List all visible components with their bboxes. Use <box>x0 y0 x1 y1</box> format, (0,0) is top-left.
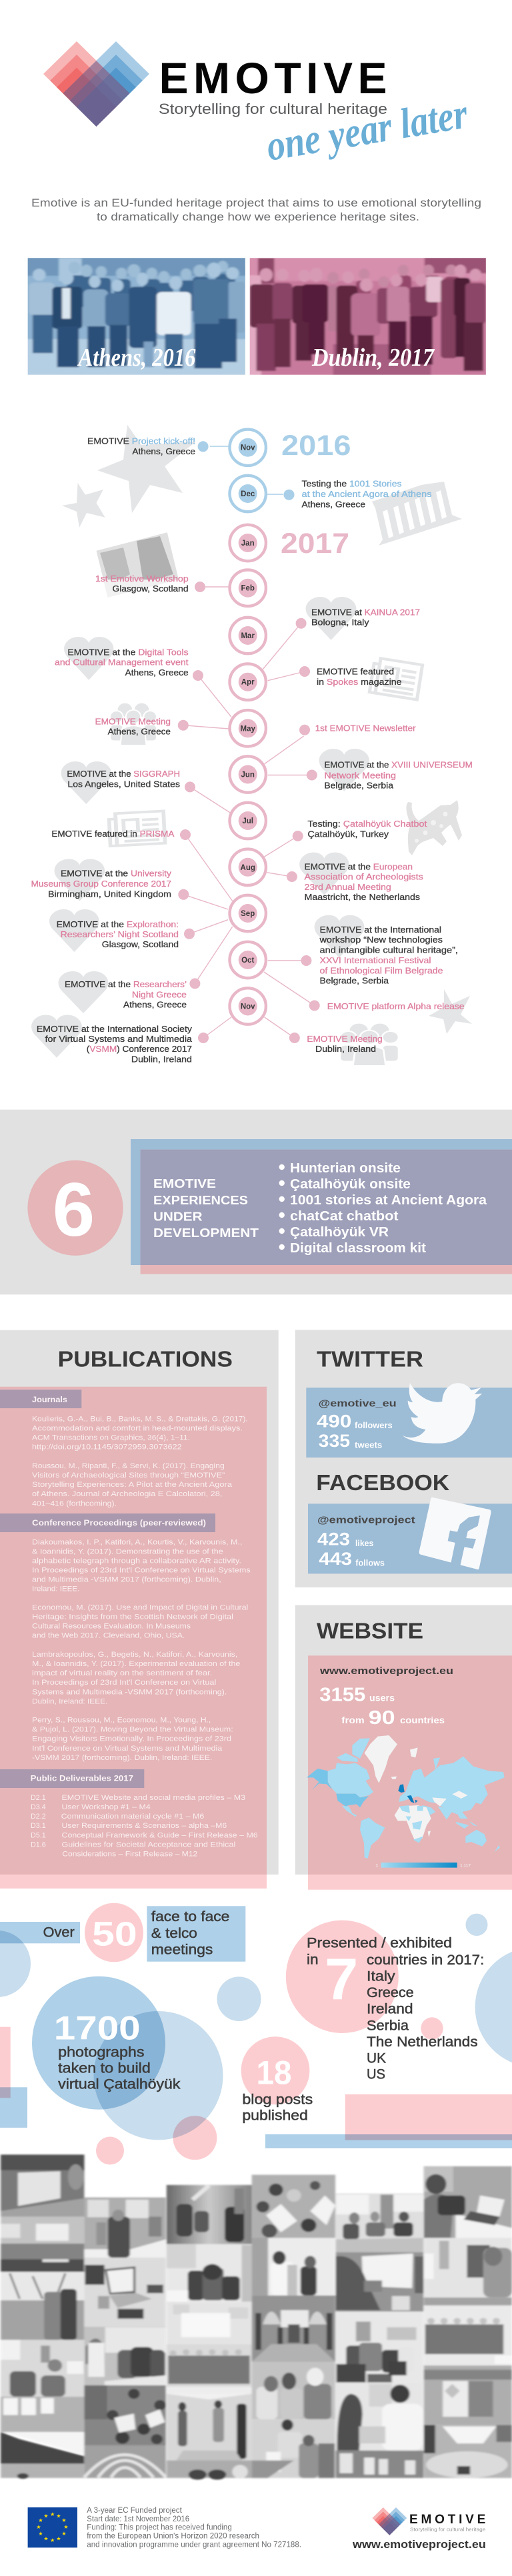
event: first workshop: Glasgow, Scotland <box>112 584 189 594</box>
event: European Association: Association of Archeologists <box>304 872 423 881</box>
website stats <box>319 1665 453 1729</box>
stat: 18 blog posts: blog posts <box>242 2092 313 2107</box>
event: EMOTIVE Meeting Dublin: EMOTIVE Meeting <box>307 1035 383 1044</box>
event: University Museums Group: Museums Group Conference 2017 <box>31 879 171 889</box>
section: journals: ACM Transactions on Graphics, 36(4), 1–11. <box>32 1434 190 1442</box>
tagline: Storytelling for cultural heritage <box>159 101 387 117</box>
website stats: countries <box>400 1715 445 1725</box>
icon: heart european <box>299 853 349 895</box>
section: conference proceedings: M., & Ioannidis, Y. (2017). Experimental evaluation of the <box>32 1660 240 1668</box>
event: VSMM: for Virtual Systems and Multimedia <box>45 1035 192 1044</box>
section: public deliverables: D5.1 <box>31 1831 46 1839</box>
website stats: 3155 <box>319 1684 365 1705</box>
twitter card: followers <box>355 1421 393 1430</box>
timeline month: Mar <box>229 618 266 653</box>
section: conference proceedings: Lambrakopoulos, G., Begetis, N., Katifori, A., Karvounis, <box>32 1651 237 1659</box>
map legend <box>375 1863 471 1868</box>
publications heading: PUBLICATIONS <box>58 1347 233 1372</box>
event: European Association: EMOTIVE at the European <box>304 862 413 871</box>
twitter card: 490 <box>317 1412 351 1432</box>
event: Explorathon <box>57 920 195 949</box>
big number 6: 6 <box>53 1168 95 1252</box>
event: VSMM <box>37 1025 209 1065</box>
map legend: 1,117 <box>460 1863 471 1868</box>
timeline month: Nov 2016 <box>229 429 266 466</box>
event: newsletter <box>299 724 416 735</box>
event: University Museums Group: Birmingham, United Kingdom <box>48 889 171 899</box>
funding text <box>87 2507 301 2549</box>
section: public deliverables: D2.2 <box>31 1813 46 1821</box>
timeline month: Nov 2017 <box>229 988 266 1025</box>
event: UNIVERSEUM: Belgrade, Serbia <box>324 781 393 790</box>
event: UNIVERSEUM <box>307 761 473 790</box>
collage column 2 <box>84 2198 166 2478</box>
event: SIGGRAPH <box>67 769 195 792</box>
section: conference proceedings: Heritage: Insights from the Scottish Network of Digital <box>32 1613 233 1621</box>
icon: heart digital tools <box>64 637 113 680</box>
experiences list: Hunterian onsite <box>290 1160 401 1176</box>
panel: six experiences <box>0 1110 512 1294</box>
section: public deliverables: D3.1 <box>31 1822 46 1830</box>
section: public deliverables: D2.1 <box>31 1794 46 1802</box>
event: University Museums Group <box>31 869 189 900</box>
website stats: 90 <box>369 1707 395 1729</box>
stat: 7 countries: Italy <box>367 1968 395 1984</box>
funding text: A 3-year EC Funded project <box>87 2507 183 2515</box>
section: public deliverables: EMOTIVE Website and social media profiles – M3 <box>61 1794 245 1802</box>
experiences heading: DEVELOPMENT <box>153 1226 259 1240</box>
stat: over 50 meetings <box>43 1909 229 1957</box>
world map of visitors <box>307 1735 505 1868</box>
section: conference proceedings: alphabetic telegraph through a collaborative AR activity. <box>32 1557 241 1565</box>
twitter card <box>306 1383 512 1458</box>
section: conference proceedings: Ireland: IEEE. <box>32 1585 79 1593</box>
icon: cat <box>406 800 462 855</box>
event: Researchers Night Greece <box>65 978 200 1010</box>
panel: website <box>295 1605 512 1890</box>
icon: people athens <box>110 703 157 745</box>
stat: 1700 photographs <box>54 2010 181 2092</box>
facebook card: likes <box>355 1539 373 1548</box>
section: public deliverables: Public Deliverables 2017 <box>31 1773 133 1783</box>
experiences list <box>279 1160 487 1256</box>
panel: twitter and facebook <box>295 1330 512 1587</box>
event: Digital Tools: Athens, Greece <box>125 668 189 677</box>
twitter card: tweets <box>355 1441 382 1450</box>
event: chatbot: Çatalhöyük, Turkey <box>307 830 389 839</box>
facebook card: 423 <box>317 1529 350 1549</box>
collage column 6 <box>424 2166 512 2478</box>
big number 6 <box>27 1160 123 1256</box>
event: KAINUA: Bologna, Italy <box>311 618 369 627</box>
experiences heading <box>153 1176 259 1240</box>
section: public deliverables: User Workshop #1 – M4 <box>61 1803 151 1811</box>
event: 1001 Stories test <box>284 480 432 509</box>
event: UNIVERSEUM: Network Meeting <box>324 771 396 780</box>
script subtitle: one year later: one year later <box>263 89 471 170</box>
twitter heading: TWITTER <box>317 1347 423 1372</box>
website heading: WEBSITE <box>317 1619 423 1643</box>
facebook card <box>308 1500 512 1573</box>
section: conference proceedings: Systems and Multimedia -VSMM 2017 (forthcoming). <box>32 1688 227 1696</box>
section: journals: Koulieris, G.-A., Bui, B., Banks, M. S., & Drettakis, G. (2017). <box>32 1415 248 1423</box>
EU flag: ★ <box>43 2535 49 2542</box>
event: KAINUA <box>296 608 420 629</box>
stat: 1700 photographs: virtual Çatalhöyük <box>58 2077 181 2092</box>
timeline connectors: 2017 <box>183 587 315 1038</box>
timeline month: May <box>229 710 266 747</box>
photo: workshop <box>96 532 179 598</box>
icon: heart explorathon <box>49 909 99 952</box>
EU flag: ★ <box>38 2517 43 2523</box>
year: 2016: 2016 <box>281 430 351 462</box>
website stats: users <box>369 1692 395 1703</box>
EU flag: ★ <box>43 2513 49 2519</box>
event: EMOTIVE Meeting Dublin: Dublin, Ireland <box>315 1045 376 1054</box>
event: International workshop: of Ethnological Film Belgrade <box>320 966 443 975</box>
experiences list: Çatalhöyük onsite <box>290 1176 411 1192</box>
stat: 1700 photographs: photographs <box>58 2044 144 2060</box>
timeline connectors: 2016 <box>210 446 283 494</box>
event: European Association <box>287 862 423 902</box>
funding text: Start date: 1st November 2016 <box>87 2515 189 2523</box>
EU flag: ★ <box>63 2524 69 2530</box>
event: Explorathon: EMOTIVE at the Explorathon: <box>57 920 179 929</box>
funding text: and innovation programme under grant agreement No 727188. <box>87 2541 301 2549</box>
icon: twitter bird <box>402 1383 482 1444</box>
timeline month: Aug <box>229 849 266 885</box>
collage column 5 <box>336 2194 423 2478</box>
section: journals <box>0 1390 248 1507</box>
section: conference proceedings: and the Web 2017. Cleveland, Ohio, USA. <box>32 1632 185 1640</box>
timeline month: Sep <box>229 895 266 931</box>
EU flag: ★ <box>50 2537 55 2543</box>
event: EMOTIVE Meeting Athens: Athens, Greece <box>108 727 171 737</box>
event: SIGGRAPH: Los Angeles, United States <box>67 779 180 789</box>
event: Alpha release: EMOTIVE platform Alpha release <box>327 1002 465 1011</box>
icon: small star <box>62 483 105 528</box>
stat: 7 countries: in <box>307 1952 319 1967</box>
event: Spokes <box>299 666 402 687</box>
footer url: www.emotiveproject.eu <box>352 2538 486 2551</box>
timeline month: Dec 2016 <box>229 476 266 512</box>
event: European Association: Maastricht, the Netherlands <box>304 893 420 902</box>
facebook card: @emotiveproject <box>317 1515 415 1525</box>
section: journals: Roussou, M., Ripanti, F., & Servi, K. (2017). Engaging <box>32 1462 225 1470</box>
timeline month: Feb <box>229 570 266 606</box>
footer logo: Storytelling for cultural heritage <box>410 2527 485 2533</box>
section: conference proceedings: Perry, S., Roussou, M., Economou, M., Young, H., <box>32 1717 211 1725</box>
icon: heart international workshop <box>315 915 364 958</box>
section: conference proceedings: Diakoumakos, I. P., Katifori, A., Kourtis, V., Karvounis, M., <box>32 1538 242 1546</box>
event: European Association: 23rd Annual Meeting <box>304 883 391 892</box>
event: Researchers Night Greece: Night Greece <box>132 990 187 999</box>
event: UNIVERSEUM: EMOTIVE at the XVIII UNIVERSEUM <box>324 761 473 770</box>
section: conference proceedings: Conference Proceedings (peer-reviewed) <box>32 1518 206 1527</box>
event: EMOTIVE Meeting Athens: EMOTIVE Meeting <box>95 717 171 727</box>
section: journals: Accommodation and comfort in head-mounted displays. <box>32 1424 243 1432</box>
overlapping rectangles <box>131 1139 512 1274</box>
event: International workshop: workshop “New technologies <box>319 935 443 945</box>
event: University Museums Group: EMOTIVE at the University <box>61 869 172 878</box>
EU flag: ★ <box>56 2535 61 2542</box>
event: VSMM: (VSMM ) Conference 2017 <box>87 1045 192 1054</box>
event: International workshop <box>301 925 458 986</box>
event: Researchers Night Greece: Athens, Greece <box>123 1001 187 1010</box>
event: Spokes: in Spokes magazine <box>317 677 402 687</box>
map legend: 1 <box>375 1863 378 1868</box>
event: International workshop: EMOTIVE at the International <box>320 925 441 935</box>
event: Researchers Night Greece: EMOTIVE at the Researchers’ <box>65 980 187 989</box>
event: International workshop: XXVI International Festival <box>320 956 431 965</box>
twitter card: 335 <box>319 1431 350 1451</box>
stat: 7 countries <box>307 1935 484 2082</box>
experiences heading: EMOTIVE <box>153 1176 216 1190</box>
experiences list: Çatalhöyük VR <box>290 1224 389 1240</box>
logo: heart of overlapping diamonds <box>43 41 149 127</box>
title: EMOTIVE: EMOTIVE <box>159 53 387 103</box>
timeline month: May: May <box>241 725 255 733</box>
stat: over 50 meetings: & telco <box>151 1926 197 1941</box>
event: International workshop: and intangible cultural heritage”, <box>320 946 458 955</box>
section: conference proceedings: & Ioannidis, Y. (2017). Demonstrating the use of the <box>32 1547 223 1555</box>
section: conference proceedings: In Proceedings of 23rd Int'l Conference on Virtual Systems <box>32 1566 251 1574</box>
section: journals: of Athens. Journal of Archeologia E Calcolatori, 28, <box>32 1490 222 1498</box>
section: conference proceedings: Dublin, Ireland: IEEE. <box>32 1697 107 1705</box>
section: public deliverables: Conceptual Framework & Guide – First Release – M6 <box>61 1831 258 1839</box>
stat: over 50 meetings: Over <box>43 1925 75 1940</box>
experiences list: 1001 stories at Ancient Agora <box>290 1192 487 1208</box>
section: public deliverables: Considerations – First Release – M12 <box>62 1850 197 1858</box>
intro text: to dramatically change how we experience heritage sites. <box>97 211 419 223</box>
stat: 18 blog posts: 18 <box>256 2054 291 2091</box>
experiences list: chatCat chatbot <box>290 1208 399 1224</box>
event: kick-off: EMOTIVE Project kick-off! <box>87 437 195 446</box>
facebook card: 443 <box>319 1549 352 1569</box>
timeline month: Aug: Aug <box>241 864 255 872</box>
intro text: Emotive is an EU-funded heritage project that aims to use emotional storytelling <box>31 197 481 209</box>
event: first workshop: 1st Emotive Workshop <box>95 574 189 584</box>
stat: 7 countries: Greece <box>367 1985 414 2000</box>
event: Spokes: EMOTIVE featured <box>317 667 394 677</box>
event: kick-off: Athens, Greece <box>132 447 195 456</box>
event: International workshop: Belgrade, Serbia <box>320 977 389 986</box>
photo: Athens 2016 <box>23 255 251 377</box>
event: newsletter: 1st EMOTIVE Newsletter <box>315 724 416 733</box>
event: chatbot <box>293 819 427 841</box>
footer logo <box>372 2507 485 2535</box>
icon: star alpha release <box>429 989 472 1034</box>
collage column 4 <box>252 2175 335 2478</box>
experiences list: Digital classroom kit <box>290 1240 426 1256</box>
stat: over 50 meetings: 50 <box>92 1915 137 1953</box>
intro text <box>31 197 481 223</box>
section: public deliverables: D1.6 <box>31 1841 46 1849</box>
website stats: www.emotiveproject.eu <box>319 1665 453 1677</box>
experiences heading: EXPERIENCES <box>153 1193 248 1207</box>
event: 1001 Stories test: Testing the 1001 Stories <box>301 480 401 489</box>
section: public deliverables: User Requirements & Scenarios – alpha –M6 <box>61 1822 227 1830</box>
section: journals: 401–416 (forthcoming). <box>32 1500 117 1507</box>
section: conference proceedings <box>0 1513 251 1762</box>
section: conference proceedings: & Pujol, L. (2017). Moving Beyond the Virtual Museum: <box>32 1726 233 1734</box>
stat: 18 blog posts <box>242 2054 313 2123</box>
timeline month: Jan: Jan <box>241 540 255 548</box>
event: VSMM: Dublin, Ireland <box>131 1055 192 1065</box>
footer logo: EMOTIVE <box>409 2513 485 2527</box>
icon: people dublin <box>340 1023 399 1066</box>
collage column 3 <box>167 2185 252 2479</box>
panel: publications <box>0 1330 279 1889</box>
event: PRISMA: EMOTIVE featured in PRISMA <box>51 829 175 839</box>
timeline month: Apr <box>229 663 266 700</box>
facebook card: follows <box>355 1558 385 1567</box>
section: conference proceedings: -VSMM 2017 (forthcoming). Dublin, Ireland: IEEE. <box>32 1754 212 1762</box>
section: conference proceedings: Int'l Conference on Virtual Systems and Multimedia <box>32 1745 222 1753</box>
stat: 7 countries: US <box>367 2067 385 2082</box>
icon: heart researchers night <box>59 971 108 1013</box>
event: Digital Tools: and Cultural Management event <box>55 658 189 667</box>
timeline month: Apr: Apr <box>241 679 255 687</box>
stat: 7 countries: Ireland <box>367 2002 413 2017</box>
photo caption: Dublin: Dublin, 2017 <box>311 344 435 372</box>
section: conference proceedings: Engaging Visitors Emotionally. In Proceedings of 23rd <box>32 1735 231 1743</box>
timeline month: Jul: Jul <box>242 817 253 825</box>
section: conference proceedings: Cultural Resources Evaluation. In Museums <box>32 1623 191 1631</box>
event: KAINUA: EMOTIVE at KAINUA 2017 <box>311 608 420 617</box>
timeline month: Oct: Oct <box>241 957 254 965</box>
icon: newspaper prisma <box>109 811 165 846</box>
stat: over 50 meetings: face to face <box>151 1909 229 1925</box>
stat: 7 countries: UK <box>367 2051 386 2066</box>
stat: 7 countries: Presented / exhibited <box>307 1935 452 1950</box>
section: journals: Journals <box>32 1395 67 1404</box>
event: EMOTIVE Meeting Athens <box>95 717 189 737</box>
timeline month: Nov 2017: Nov <box>241 1003 255 1011</box>
section: conference proceedings: and Multimedia -VSMM 2017 (forthcoming). Dublin, <box>32 1575 221 1583</box>
stat: 7 countries: countries in 2017: <box>367 1952 484 1968</box>
timeline month: Dec 2016: Dec <box>241 490 255 498</box>
EU flag: ★ <box>50 2511 55 2517</box>
photo caption: Athens: Athens, 2016 <box>77 344 195 372</box>
experiences heading: UNDER <box>153 1210 203 1224</box>
stat: 7 countries: 7 <box>325 1946 358 2012</box>
event: Digital Tools <box>55 647 203 681</box>
section: public deliverables <box>0 1769 258 1858</box>
icon: newspaper spokes <box>369 657 423 699</box>
section: journals: Visitors of Archaeological Sites through “EMOTIVE” <box>32 1472 225 1480</box>
EU flag: ★ <box>38 2531 43 2537</box>
event: chatbot: Testing: Çatalhöyük Chatbot <box>307 819 427 829</box>
collage column 1 <box>1 2154 84 2479</box>
section: journals: http://doi.org/10.1145/3072959.3073622 <box>32 1444 182 1452</box>
icon: heart vsmm <box>31 1015 82 1058</box>
event: EMOTIVE Meeting Dublin <box>289 1033 383 1054</box>
section: conference proceedings: In Proceedings of 23rd Int'l Conference on Virtual <box>32 1679 216 1687</box>
section: public deliverables: Guidelines for Societal Acceptance and Ethical <box>61 1841 235 1849</box>
event: Alpha release <box>309 1001 465 1011</box>
stat: 1700 photographs: 1700 <box>54 2010 141 2047</box>
timeline month: Jan <box>229 525 266 561</box>
event: 1001 Stories test: at the Ancient Agora of Athens <box>301 490 432 499</box>
twitter card: @emotive_eu <box>319 1398 397 1409</box>
section: public deliverables: D3.4 <box>31 1803 46 1811</box>
icon: heart universeum <box>319 749 369 791</box>
decorative stat bubbles and bars <box>0 1903 512 2165</box>
EU flag: ★ <box>56 2513 61 2519</box>
stat: 7 countries: Serbia <box>367 2018 409 2033</box>
EU flag <box>28 2507 77 2547</box>
timeline month: Sep: Sep <box>241 910 255 918</box>
icon: facebook logo <box>421 1500 489 1567</box>
timeline month: Jun <box>229 756 266 793</box>
section: public deliverables: Communication material cycle #1 – M6 <box>61 1813 204 1821</box>
EU flag: ★ <box>61 2517 67 2523</box>
section: conference proceedings: impact of virtual reality on the sentiment of fear. <box>32 1669 212 1677</box>
year: 2017: 2017 <box>281 528 349 560</box>
event: Explorathon: Glasgow, Scotland <box>102 940 179 949</box>
funding text: Funding: This project has received funding <box>87 2524 232 2532</box>
section: journals: Storytelling Experiences: A Pilot at the Ancient Agora <box>32 1481 232 1489</box>
stat: over 50 meetings: meetings <box>151 1942 213 1957</box>
icon: heart siggraph <box>61 761 111 804</box>
timeline month: Nov 2016: Nov <box>241 444 255 452</box>
section: conference proceedings: Economou, M. (2017). Use and Impact of Digital in Cultural <box>32 1604 248 1612</box>
event: VSMM: EMOTIVE at the International Society <box>37 1025 193 1034</box>
stat: 18 blog posts: published <box>242 2108 308 2123</box>
website stats: from <box>341 1715 365 1725</box>
photo collage <box>1 2154 512 2479</box>
icon: Parthenon temple <box>372 482 462 546</box>
stat: 7 countries: The Netherlands <box>367 2034 478 2050</box>
photo: Dublin 2017 <box>245 255 493 377</box>
timeline month: Oct <box>229 942 266 978</box>
event: first workshop <box>95 574 205 594</box>
timeline month: Feb: Feb <box>241 585 255 593</box>
timeline month: Jul <box>229 803 266 839</box>
stat: 1700 photographs: taken to build <box>58 2061 151 2076</box>
EU flag: ★ <box>36 2524 41 2530</box>
icon: heart kainua <box>306 597 356 640</box>
event: SIGGRAPH: EMOTIVE at the SIGGRAPH <box>67 769 180 779</box>
event: 1001 Stories test: Athens, Greece <box>301 500 365 509</box>
timeline month: Jun: Jun <box>241 771 255 779</box>
funding text: from the European Union's Horizon 2020 research <box>87 2532 259 2540</box>
event: Explorathon: Researchers’ Night Scotland <box>61 930 179 939</box>
icon: large star <box>97 425 196 513</box>
event: kick-off <box>87 437 209 456</box>
EU flag: ★ <box>61 2531 67 2537</box>
event: Digital Tools: EMOTIVE at the Digital Tools <box>67 647 189 657</box>
timeline month: Mar: Mar <box>241 632 255 640</box>
facebook heading: FACEBOOK <box>316 1470 449 1495</box>
icon: heart university <box>55 859 105 901</box>
